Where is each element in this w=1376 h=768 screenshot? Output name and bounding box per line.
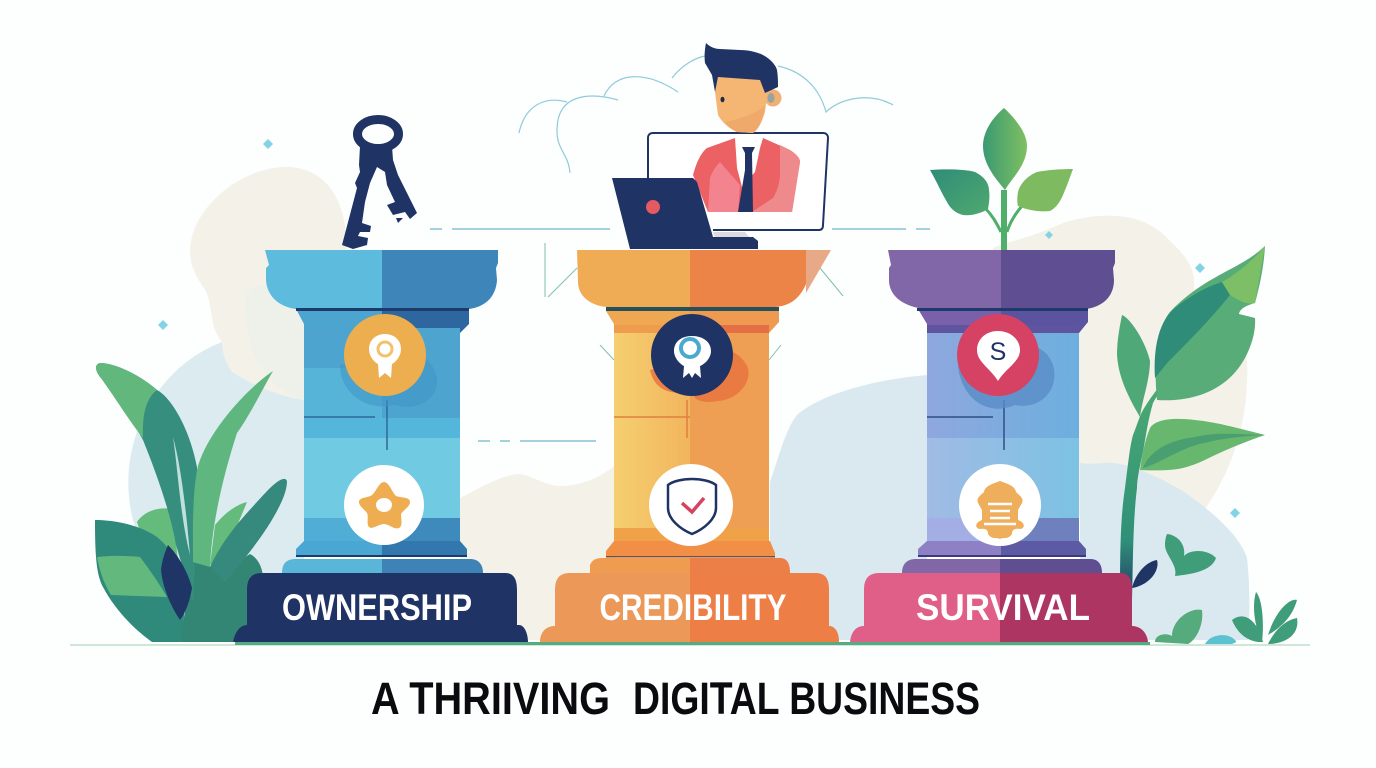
- ground plants: [1155, 610, 1202, 644]
- ground line: [70, 644, 1310, 646]
- plant stem: [1120, 361, 1187, 600]
- face: [715, 77, 767, 133]
- shirt: [735, 138, 763, 187]
- shaft: [927, 333, 1079, 438]
- plinth: [555, 573, 690, 642]
- torso highlight left: [708, 162, 740, 212]
- plinth: [864, 573, 1000, 642]
- heart leaves: [1165, 534, 1216, 576]
- shaft: [614, 328, 769, 542]
- collar: [918, 309, 1001, 333]
- pillar: credibility: [540, 250, 839, 642]
- capital: [577, 250, 690, 307]
- cloud outlines: [519, 56, 893, 173]
- thin green accent lines: [545, 243, 843, 360]
- tie: [738, 147, 755, 212]
- pillar: ownership: [233, 250, 528, 642]
- title: [371, 673, 980, 724]
- background blobs: [128, 167, 1249, 640]
- tall leaf: [96, 363, 197, 603]
- tall leaf highlight: [173, 437, 190, 555]
- connector dashes: [430, 229, 930, 441]
- icon: shield with check: [649, 464, 733, 546]
- capital: [888, 250, 1001, 309]
- base flare: [918, 541, 1001, 557]
- shaft: [304, 328, 460, 418]
- right leaf: [1017, 169, 1073, 211]
- plinth: [233, 573, 528, 642]
- icon: ribbon badge: [344, 314, 426, 396]
- laptop camera dot: [646, 200, 660, 214]
- big leaf: [1156, 246, 1265, 400]
- left plant: [95, 363, 287, 642]
- ground line accent: [235, 642, 1150, 645]
- sprout stem: [1001, 190, 1007, 250]
- green leaf: [193, 371, 273, 567]
- sprout on survival pillar: [930, 108, 1073, 250]
- lower right leaf: [1140, 419, 1265, 470]
- pillar label: OWNERSHIP: [282, 587, 472, 628]
- icon: ribbon badge: [651, 314, 733, 396]
- teal leaf: [210, 479, 287, 582]
- hair: [705, 43, 778, 93]
- torso highlight right: [752, 145, 800, 212]
- icon: location pin with S: S: [990, 338, 1006, 366]
- icon shadow: [340, 350, 437, 407]
- lower leaf dark band: [1143, 434, 1265, 468]
- icon: keys: [342, 120, 417, 249]
- base flare: [296, 541, 382, 557]
- title: DIGITAL BUSINESS: [633, 673, 980, 724]
- base flare: [606, 541, 775, 557]
- left leaf: [930, 169, 989, 215]
- back leaves: [137, 508, 178, 560]
- mound: [180, 554, 263, 642]
- ear inner: [768, 93, 774, 103]
- title: A THRIIVING: [371, 673, 610, 724]
- icon shadow: [650, 350, 749, 402]
- capital light corner: [806, 250, 831, 293]
- capital: [265, 250, 382, 309]
- pillar label: SURVIVAL: [916, 587, 1090, 628]
- icon: location pin with S: [957, 314, 1039, 396]
- collar: [606, 311, 690, 333]
- pillar label: CREDIBILITY: [600, 587, 787, 628]
- ear: [764, 90, 782, 106]
- big leaf tip: [1222, 246, 1265, 303]
- screen frame: [648, 133, 828, 230]
- laptop: [612, 178, 758, 249]
- pillar: survival: [850, 250, 1148, 642]
- right plant: [1117, 246, 1297, 645]
- eye: [720, 97, 724, 102]
- torso: [693, 138, 800, 212]
- icon: star: [344, 465, 424, 545]
- chin shade: [725, 105, 765, 133]
- icon: temple emblem: [959, 464, 1041, 546]
- presenter at laptop: [612, 43, 828, 249]
- navy leaf accent: [161, 545, 192, 620]
- big leaf dark band: [1155, 282, 1230, 378]
- large foreground leaf: [95, 520, 184, 642]
- center leaf: [983, 108, 1027, 190]
- icon shadow: [958, 345, 1054, 409]
- laptop shadow: [713, 232, 750, 238]
- collar: [296, 309, 382, 333]
- small left leaf: [1117, 315, 1150, 417]
- decorative diamonds: [158, 139, 1240, 518]
- navy leaf: [1132, 560, 1158, 588]
- tall leaf tip: [96, 363, 157, 438]
